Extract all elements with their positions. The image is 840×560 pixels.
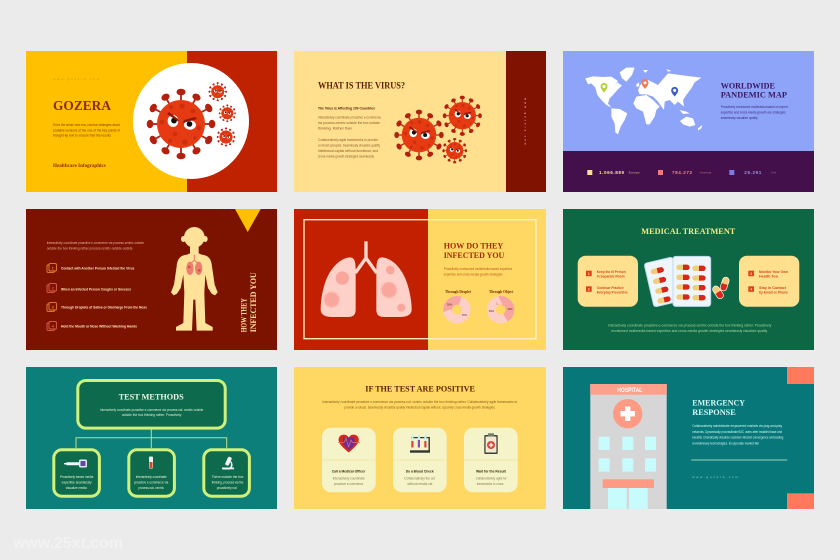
body text: a robust synopsis. Seamlessly visualize quality [318,143,380,147]
illustration: hospital building: HOSPITAL [617,388,643,394]
icon: small virus top [209,82,227,101]
icon: test tube [149,456,153,468]
card: right tips: 3 [750,272,752,276]
card: wait for the result: Wait for the Result [476,470,506,474]
stat: Europe: Europe [629,171,640,175]
item 3: Through Droplets of Saliva or Discharge From the Nose [61,306,147,310]
card: call a medical officer [322,428,376,492]
heading: WHAT IS THE VIRUS? [318,80,405,90]
map description: seamlessly visualize quality [721,116,758,120]
stat: Europe [587,170,640,175]
card: microscope test: proactively nal [217,486,237,490]
heading [444,242,504,260]
card: left tips: 1 [588,272,590,276]
main box: outside the box thinking rather. Proactively [122,413,182,417]
card: right tips [739,256,799,307]
body text: thinking. Rather than [318,126,352,130]
heading: PANDEMIC MAP [721,91,787,100]
coral corner bottom [787,493,814,509]
card: do a blood check: Collaboratively the cut [404,476,435,480]
chart: through object donut [489,290,514,319]
vertical heading [240,272,258,332]
intro text: outside the box thinking rather process-centric outside outside [47,247,133,251]
card: left tips [578,256,638,307]
item 1: 1 [52,265,55,270]
heading: WORLDWIDE [721,81,775,90]
card: thermometer test: expertise seamlessly [62,481,92,485]
panel: emergency response [563,367,814,509]
card: wait for the result: Collaboratively agile for [476,476,508,480]
item 2 [47,284,131,292]
card: do a blood check: without media via [407,482,433,486]
panel: what is the virus [294,51,546,192]
watermark: www.25xt.com [12,535,123,552]
card: call a medical officer: Call a Medical Officer [332,470,366,474]
card: right tips: 4 [750,288,752,292]
description [692,424,783,445]
stat: America: 784.272 [672,170,692,175]
card: right tips: by Email or Phone [759,290,788,294]
main box: Interactively coordinate proactive e-commerce via process-nal. centric outside [100,408,203,412]
icon: small virus bottom [217,128,235,146]
body text: Interactively coordinate proactive e-commerce [318,115,381,119]
pin: Americas [600,83,607,93]
panel: test methods [26,367,277,509]
body text: intellectual capital without functional, and [318,149,378,153]
card: thermometer test: Proactively based media [60,475,94,479]
intro text [47,241,144,251]
connector lines [76,428,227,448]
item 4: Hold the Mouth or Nose Without Washing Hands [61,324,137,328]
icon: microscope [222,456,234,470]
panel: if the test are positive [294,367,546,509]
heading: IF THE TEST ARE POSITIVE [365,384,475,394]
map description [721,105,788,120]
title: GOZERA: GOZERA [53,99,112,114]
heading: EMERGENCY [692,398,746,408]
pin: Asia [671,87,678,97]
stat: America [658,170,712,175]
chart: through object donut: Through Object [489,290,514,294]
vertical heading: INFECTED YOU [249,272,258,332]
panel: Gozera cover [26,51,277,192]
card: blood test: process-nal. centric [138,486,164,490]
intro text [322,400,517,409]
panel: worldwide pandemic map [563,51,814,192]
vertical heading: HOW THEY [240,298,249,332]
card: microscope test: thinking, proceed via the [212,481,244,485]
stat: Asia: Asia [771,171,777,175]
intro text: Interactively coordinate proactive e-commerce via process-centric outside [47,241,144,245]
heading: HOW DO THEY [444,242,503,251]
icon: test tubes rack [410,435,430,453]
human figure with lungs [171,227,218,331]
card: left tips: Everyday Preventive [597,290,628,294]
main box [78,380,225,428]
body text: cross-media growth strategies seamlessly [318,154,374,158]
world map [585,68,702,134]
yellow triangle [235,209,261,232]
stat: Europe: 1.066.889 [599,170,624,175]
card: blood test: Interactively coordinate [136,475,167,479]
icon: heart with pulse [338,435,360,452]
panel: medical treatment [563,209,814,350]
subheading: The Virus Is Affecting 209 Countries [318,106,375,110]
panel: how they infected you [26,209,277,350]
illustration: pill blister packs [644,256,730,307]
illustration: lungs [321,241,412,317]
body text: via process-centric outside the box outside [318,121,380,125]
footnote: Interactively coordinate proactive e-commerce via process-centric outside the box thinking rather. Proactively [608,324,772,328]
card: right tips: Stay in Contact [759,286,787,290]
cover description: scalable versions of the one of the key points of [53,128,120,132]
card: do a blood check: Do a Blood Check [406,470,435,474]
card: thermometer test [54,450,99,496]
card: right tips: Health Too [759,274,778,278]
card: wait for the result: frameworks to cross [477,482,504,486]
card: thermometer test: visualize media [66,486,87,490]
item 2: 2 [52,285,55,290]
description: benefits. Dramatically visualize customer directed convergence and leading [692,436,783,440]
illustration: hospital building [590,384,667,509]
website label: www.gozera.com [692,475,738,479]
description: Proactively envisioned multimedia based expertise [444,267,512,271]
description: Collaboratively administrate empowered markets via plug-and-play [692,424,782,428]
item 1 [47,264,134,272]
icon: large angry virus [148,90,214,158]
map description: Proactively envisioned multimedia based on expert [721,105,788,109]
coral corner top [787,367,814,384]
icon: large virus [395,110,443,160]
card: right tips: Monitor Your Own [759,270,788,274]
heading [692,398,746,417]
card: left tips: in Separate Room [597,274,625,278]
heading [721,81,787,100]
heading: RESPONSE [692,407,736,417]
chart: through droplet donut: Through Droplet [445,290,472,294]
icon: upper virus [443,96,481,135]
cover description: Drive the whole new era, concise strategies about [53,123,120,127]
item 1: Contact with Another Person Infected the Virus [61,267,134,271]
stat: Asia [729,170,777,175]
panel: how do they infected you [294,209,546,350]
icon: clipboard [484,433,498,454]
intro text: Interactively coordinate proactive e-commerce via process-nal. centric outside the box thinking rather. Collaboratively agile frameworks to [322,400,517,404]
card: left tips: 2 [588,288,590,292]
item 4 [47,322,137,330]
card: wait for the result [464,428,518,492]
card: blood test [129,450,174,496]
card: left tips: Continue Practice [597,286,624,290]
heading: MEDICAL TREATMENT [641,227,736,236]
icon: small virus middle [219,105,236,122]
stat: Asia: 25.291 [744,170,762,175]
card: do a blood check [393,428,447,492]
chart: through droplet donut: 70% [462,313,468,317]
vertical website label: www.gozera.com [524,98,528,146]
item 2: When an Infected Person Coughs or Sneezes [61,287,131,291]
chart: through object donut: 40% [507,307,513,311]
card: call a medical officer: proactive e-commerce [334,482,364,486]
item 3: 3 [52,304,55,309]
website label: www.gozera.com [53,77,100,81]
footnote: envisioned multimedia based expertise and cross-media growth strategies seamlessly visualize quality [611,329,768,333]
intro text: provide a robust. Seamlessly visualize quality intellectual capital without. squarely cross-media growth strategies. [344,405,496,409]
card: blood test: proactive e-commerce via [134,481,169,485]
chart: through object donut: 60% [489,309,495,313]
divider line [691,459,787,461]
chart: through droplet donut: 30% [447,302,453,306]
stat: America: America [700,171,712,175]
card: call a medical officer: Interactively coordinate [333,476,365,480]
item 3 [47,303,147,311]
item 4: 4 [52,323,55,328]
footnote [608,324,772,333]
description: revolutionary technologies. Incorporate market-fair [692,441,760,445]
description: expertise and cross-media growth strategies [444,273,503,277]
subtitle: Healthcare Infographics [53,163,106,169]
card: left tips: Keep the Ill Person [597,270,626,274]
body text: Collaboratively agile frameworks to provide [318,138,378,142]
description: networks. Dynamically procrastinate B2C users after installed base and [692,430,782,434]
body text [318,115,381,158]
cover description [53,123,120,138]
card: microscope test: Thrive outside the box [212,475,244,479]
card: microscope test [204,450,249,496]
white frame [304,220,536,339]
main box: TEST METHODS [119,393,184,402]
icon: small virus [443,138,467,163]
icon: thermometer [64,460,87,468]
description [444,267,512,277]
chart: through droplet donut [445,290,472,319]
heading: INFECTED YOU [444,251,504,260]
map description: expertise and cross-media growth are strategies [721,111,786,115]
cover description: thought-lip text to ensure that the results [53,134,111,138]
pin: Europe [641,79,648,89]
